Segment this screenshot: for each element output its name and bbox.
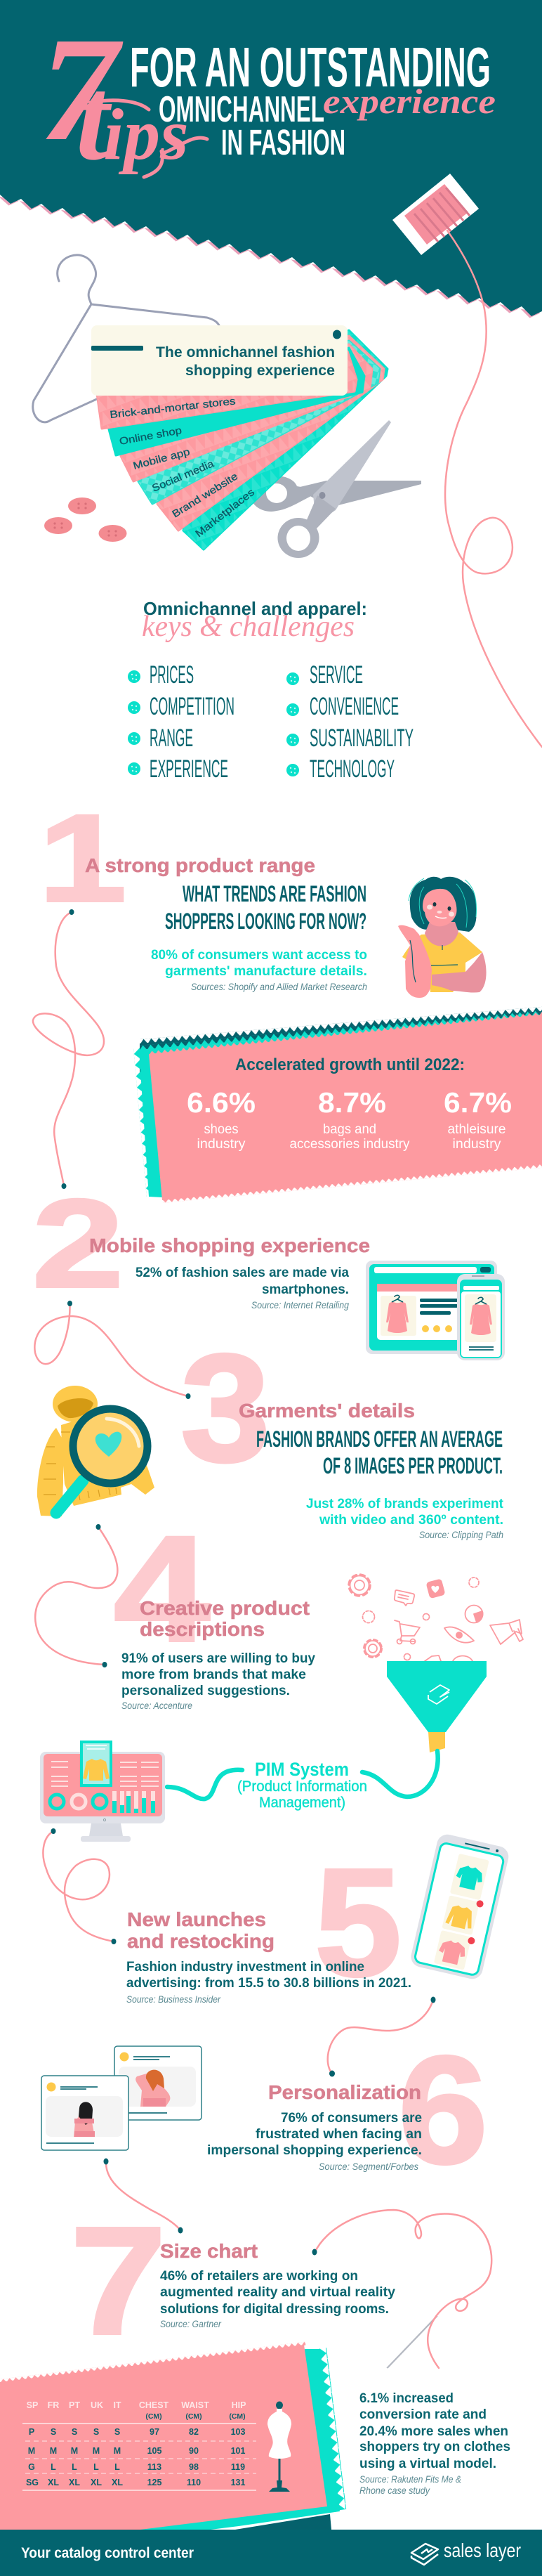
icon: social cards [41, 2046, 201, 2150]
size table: M [93, 2446, 100, 2456]
section 3 text: Source: Clipping Path [419, 1530, 503, 1540]
size table: UK [91, 2400, 103, 2410]
stat: bags [289, 1086, 410, 1152]
thread: from spool down the right edge [445, 230, 542, 747]
thread: 6 to 7 [104, 2159, 183, 2233]
section 6 text: 76% of consumers are [281, 2110, 422, 2126]
section 1 text [85, 854, 367, 992]
icon: mannequin [267, 2402, 291, 2492]
section 1 text: SHOPPERS LOOKING FOR NOW? [165, 909, 366, 934]
section 7 right text: 20.4% more sales when [359, 2424, 508, 2439]
footer: Your catalog control center [21, 2545, 194, 2561]
section 2 text: Mobile shopping experience [89, 1235, 370, 1256]
pink layer [0, 2342, 327, 2530]
list: keys and challenges: SUSTAINABILITY [310, 724, 414, 752]
heading: keys and challenges: Omnichannel and apparel: [143, 598, 367, 619]
size table: XL [69, 2478, 80, 2487]
size table: 113 [147, 2462, 161, 2472]
stat: shoes: 6.6% [187, 1086, 256, 1119]
section 2 text [89, 1235, 370, 1310]
turquoise layer [133, 1010, 542, 1197]
icon: phone with products [409, 1833, 510, 1981]
section 7 text: augmented reality and virtual reality [160, 2284, 395, 2300]
icon: jacket and magnifier [37, 1386, 154, 1516]
stat: bags: 8.7% [318, 1086, 386, 1119]
size table: 90 [189, 2446, 199, 2456]
section 2 text: Source: Internet Retailing [251, 1300, 349, 1310]
icon: funnel [387, 1661, 487, 1752]
stat: shoes: industry [197, 1137, 246, 1152]
section 4 text: Source: Accenture [121, 1700, 192, 1711]
list: keys and challenges: COMPETITION [150, 693, 234, 720]
big number 6: 6 [398, 2025, 488, 2196]
list: keys and challenges: PRICES [150, 661, 194, 689]
section 1 text: A strong product range [85, 854, 315, 876]
size table: IT [113, 2400, 121, 2410]
section 4 text: personalized suggestions. [121, 1683, 290, 1698]
section 6 text: Source: Segment/Forbes [319, 2161, 418, 2172]
section 4 text [121, 1597, 315, 1711]
section 7 right text: shoppers try on clothes [359, 2439, 510, 2454]
panel: accelerated growth [133, 1006, 542, 1203]
section 7 right text: Source: Rakuten Fits Me & [359, 2474, 461, 2485]
section 6 text: Personalization [268, 2081, 421, 2103]
section 7 text: 46% of retailers are working on [160, 2268, 358, 2284]
blade: online shop: Online shop [119, 425, 183, 448]
thread: 2 to 3 [34, 1301, 190, 1399]
section 3 text: Just 28% of brands experiment [306, 1496, 503, 1511]
swatch cover card [91, 325, 348, 396]
turquoise layer [126, 2348, 346, 2530]
title: tips [76, 53, 189, 185]
label: PIM system [237, 1759, 367, 1811]
section 6 text: frustrated when facing an [256, 2126, 422, 2142]
thread: 1 to 2 [33, 909, 104, 1189]
section 6 text: impersonal shopping experience. [207, 2142, 422, 2158]
size table: SP [27, 2400, 38, 2410]
size table: FR [48, 2400, 59, 2410]
icon: hanger [33, 255, 220, 422]
blade: social media: Social media [150, 458, 216, 495]
stat: athleisure: industry [452, 1137, 501, 1152]
section 6 text [207, 2081, 422, 2172]
icon: tablet and phone [366, 1261, 505, 1360]
panel: size chart [0, 2342, 346, 2530]
size table: L [72, 2462, 77, 2472]
size table: WAIST [181, 2400, 209, 2410]
size table: PT [69, 2400, 80, 2410]
icon: sales layer logo [411, 2544, 438, 2565]
list: keys and challenges: EXPERIENCE [150, 755, 228, 783]
size table: 101 [231, 2446, 245, 2456]
size table: L [93, 2462, 99, 2472]
size table: L [51, 2462, 56, 2472]
section 5 text: Source: Business Insider [126, 1994, 220, 2005]
section 5 text: Fashion industry investment in online [126, 1959, 364, 1975]
size table [22, 2400, 256, 2490]
section 3 text: Garments' details [239, 1400, 415, 1422]
heading: keys and challenges [142, 598, 367, 643]
size table: 125 [147, 2478, 161, 2487]
title: OMNICHANNEL [159, 89, 324, 130]
size table: P [29, 2427, 34, 2437]
blade: online shop [109, 348, 364, 455]
section 7 right text: 6.1% increased [359, 2390, 454, 2406]
footer [0, 2530, 542, 2576]
size table: S [114, 2427, 120, 2437]
list: keys and challenges [128, 661, 414, 783]
section 3 text [239, 1400, 503, 1540]
section 1 text: Sources: Shopify and Allied Market Research [191, 982, 367, 992]
blade: mobile app: Mobile app [132, 446, 191, 472]
section 2 text: 52% of fashion sales are made via [136, 1265, 349, 1280]
section 5 text: advertising: from 15.5 to 30.8 billions in 2021. [126, 1975, 411, 1991]
icon: buttons [44, 497, 126, 542]
big number 1: 1 [39, 790, 126, 928]
section 4 text: descriptions [140, 1618, 265, 1640]
swatch cover card: The omnichannel fashion [156, 344, 335, 360]
size table: XL [112, 2478, 123, 2487]
panel: swatch fan [91, 325, 388, 549]
section 4 text: more from brands that make [121, 1667, 306, 1682]
blade: brick-and-mortar: Brick-and-mortar stores [110, 396, 236, 421]
size table: (CM) [229, 2412, 246, 2421]
size table: 119 [231, 2462, 245, 2472]
section 7 text: Source: Gartner [160, 2319, 221, 2329]
list: keys and challenges: CONVENIENCE [310, 693, 399, 720]
icon: thread spool [392, 174, 479, 255]
stat: athleisure [444, 1086, 512, 1152]
header background [0, 0, 542, 318]
thread and needle [312, 2210, 491, 2368]
footer: sales layer [444, 2539, 521, 2561]
swatch cover card: shopping experience [185, 363, 335, 379]
blade: marketplaces: Marketplaces [194, 487, 257, 540]
big number 3: 3 [180, 1323, 270, 1494]
stat: bags: bags and [323, 1122, 376, 1137]
pink layer [149, 1012, 542, 1203]
section 5 text: and restocking [127, 1930, 275, 1952]
big number 5: 5 [315, 1837, 402, 2008]
stat: bags: accessories industry [289, 1137, 410, 1152]
blade: brand website [157, 336, 384, 531]
big number 7: 7 [70, 2196, 166, 2367]
dark teal layer [140, 1006, 542, 1075]
size table: XL [48, 2478, 59, 2487]
size table: S [72, 2427, 77, 2437]
label: PIM system: (Product Information [237, 1778, 367, 1795]
thread: 4 to 5 [43, 1828, 117, 1944]
stat: shoes: shoes [204, 1122, 239, 1137]
connector: PIM system tube [167, 1751, 438, 1799]
size table: M [71, 2446, 78, 2456]
icon: woman [398, 877, 487, 998]
section 7 right text [359, 2390, 510, 2496]
size table: XL [91, 2478, 102, 2487]
thread: 3 to 4 [35, 1524, 117, 1667]
title: IN FASHION [221, 122, 345, 162]
size table: (CM) [185, 2412, 202, 2421]
icon: scissors [250, 420, 421, 558]
size table: M [50, 2446, 57, 2456]
size table: M [114, 2446, 121, 2456]
section 2 text: smartphones. [262, 1282, 349, 1297]
section 7 text [160, 2240, 395, 2329]
size table: M [28, 2446, 35, 2456]
dark teal layer [235, 2514, 331, 2530]
section 1 text: garments' manufacture details. [165, 963, 367, 979]
title: 7 [39, 6, 124, 171]
size table: HIP [232, 2400, 246, 2410]
blade: mobile app [121, 344, 372, 481]
section 5 text [126, 1908, 411, 2005]
section 7 right text: conversion rate and [359, 2407, 487, 2422]
blade: marketplaces [183, 330, 388, 549]
blade: social media [138, 341, 380, 504]
big number 4: 4 [114, 1505, 210, 1673]
size table: 110 [187, 2478, 201, 2487]
big number 2: 2 [32, 1173, 124, 1313]
icons: data cloud [349, 1575, 523, 1661]
heading: keys and challenges: keys & challenges [142, 611, 355, 643]
section 7 right text: using a virtual model. [359, 2456, 496, 2471]
section 7 right text: Rhone case study [359, 2485, 430, 2496]
title [39, 6, 496, 185]
section 5 text: New launches [127, 1908, 266, 1930]
size table: SG [26, 2478, 39, 2487]
panel heading: Accelerated growth until 2022: [235, 1055, 465, 1074]
size table: 105 [147, 2446, 161, 2456]
stat: athleisure: athleisure [448, 1122, 505, 1137]
size table: 103 [231, 2427, 245, 2437]
section 4 text: 91% of users are willing to buy [121, 1651, 315, 1666]
stat: athleisure: 6.7% [444, 1086, 512, 1119]
size table: (CM) [145, 2412, 162, 2421]
size table: 82 [189, 2427, 199, 2437]
size table: 97 [150, 2427, 159, 2437]
size table: G [28, 2462, 35, 2472]
thread: 5 to 6 [328, 1997, 435, 2077]
section 7 text: Size chart [160, 2240, 258, 2262]
front card [41, 2076, 128, 2150]
label: PIM system: PIM System [255, 1759, 349, 1780]
size table: 131 [231, 2478, 245, 2487]
section 1 text: 80% of consumers want access to [151, 947, 367, 963]
title: experience [323, 82, 496, 121]
size table: S [51, 2427, 56, 2437]
section 7 text: solutions for digital dressing rooms. [160, 2301, 389, 2317]
section 3 text: with video and 360º content. [319, 1512, 503, 1528]
blade: brand website: Brand website [171, 471, 240, 520]
label: PIM system: Management) [259, 1795, 345, 1811]
blade: brick-and-mortar [97, 351, 357, 429]
list: keys and challenges: SERVICE [310, 661, 363, 689]
section 4 text: Creative product [140, 1597, 310, 1619]
list: keys and challenges: TECHNOLOGY [310, 755, 395, 783]
size table: 98 [189, 2462, 199, 2472]
list: keys and challenges: RANGE [150, 724, 193, 752]
size table: S [93, 2427, 99, 2437]
icon: monitor [40, 1741, 165, 1842]
size table: L [114, 2462, 120, 2472]
stat: shoes [187, 1086, 256, 1152]
size table: CHEST [139, 2400, 169, 2410]
back card [114, 2046, 201, 2120]
section 1 text: WHAT TRENDS ARE FASHION [183, 881, 366, 906]
